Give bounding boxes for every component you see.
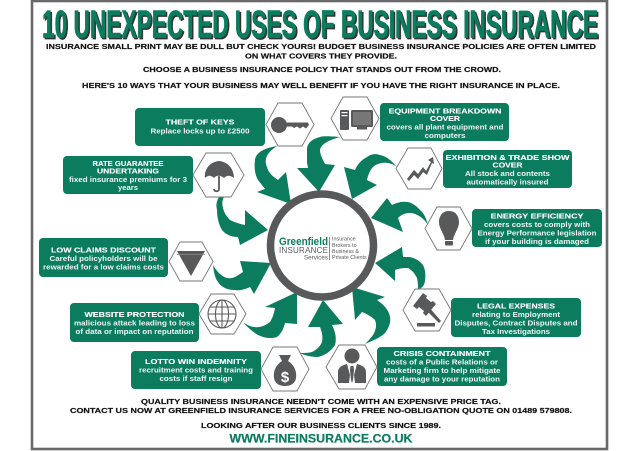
- panel: energy efficiency: ENERGY EFFICIENCY: [490, 212, 584, 220]
- logo: strapline: Private Clients: [332, 255, 367, 261]
- icon: key: [266, 103, 314, 146]
- arrow: theft of keys: [255, 146, 291, 204]
- logo: insurance: INSURANCE: [279, 246, 328, 255]
- panel: energy efficiency: Energy Performance legislation: [478, 228, 596, 238]
- icon: rising chart: [396, 148, 442, 189]
- arrow: energy efficiency: [371, 198, 428, 232]
- logo: services: Services: [304, 254, 329, 262]
- footer text: LOOKING AFTER OUR BUSINESS CLIENTS SINCE 1989.: [201, 421, 441, 430]
- arrow: exhibition and trade show: [344, 154, 397, 199]
- panel: lotto win indemnity: recruitment costs and training: [139, 366, 253, 374]
- panel: rate guarantee undertaking: [63, 156, 193, 194]
- panel: equipment breakdown cover: COVER: [430, 114, 461, 123]
- panel: equipment breakdown cover: computers: [424, 131, 466, 140]
- panel: crisis containment: CRISIS CONTAINMENT: [394, 349, 491, 358]
- panel: equipment breakdown cover: covers all plant equipment and: [386, 122, 504, 132]
- panel: legal expenses: [451, 298, 581, 337]
- icon: money bag: $: [281, 369, 290, 386]
- intro text: ON WHAT COVERS THEY PROVIDE.: [245, 52, 397, 60]
- panel: legal expenses: Disputes, Contract Disputes and: [454, 318, 578, 328]
- panel: website protection: malicious attack leading to loss: [74, 318, 195, 328]
- panel: lotto win indemnity: costs if staff resign: [160, 374, 232, 383]
- intro text: CHOOSE A BUSINESS INSURANCE POLICY THAT STANDS OUT FROM THE CROWD.: [143, 65, 501, 74]
- icon: gavel: [403, 289, 451, 331]
- icon: globe: [199, 294, 246, 334]
- panel: theft of keys: THEFT OF KEYS: [166, 118, 235, 126]
- panel: lotto win indemnity: LOTTO WIN INDEMNITY: [145, 357, 247, 366]
- arrow: rate guarantee: [216, 197, 268, 245]
- arrow: low claims: [213, 261, 271, 294]
- intro text: [46, 42, 597, 90]
- panel: rate guarantee undertaking: fixed insurance premiums for 3: [69, 175, 187, 184]
- panel: energy efficiency: covers costs to comply with: [484, 220, 590, 229]
- panel: low claims discount: Careful policyholders will be: [50, 254, 158, 263]
- panel: legal expenses: Tax Investigations: [482, 327, 550, 336]
- panel: energy efficiency: if your building is damaged: [485, 237, 589, 246]
- intro text: INSURANCE SMALL PRINT MAY BE DULL BUT CHECK YOURS! BUDGET BUSINESS INSURANCE POLICIES ARE OFTEN LIMITED: [46, 42, 597, 51]
- logo: strapline: Insurance: [332, 236, 356, 242]
- panel: theft of keys: Replace locks up to £2500: [150, 126, 250, 136]
- footer text: [70, 397, 572, 430]
- icon: umbrella: [193, 153, 244, 197]
- arrow: equipment breakdown: [297, 136, 340, 192]
- footer text: QUALITY BUSINESS INSURANCE NEEDN'T COME WITH AN EXPENSIVE PRICE TAG.: [141, 397, 501, 406]
- panel: crisis containment: any damage to your reputation: [384, 374, 500, 384]
- logo: strapline: Business &: [332, 249, 359, 255]
- icon: business person: [326, 345, 377, 389]
- panel: legal expenses: relating to Employment: [472, 310, 561, 319]
- footer text: CONTACT US NOW AT GREENFIELD INSURANCE SERVICES FOR A FREE NO-OBLIGATION QUOTE ON 01489 579808.: [70, 406, 572, 415]
- panel: exhibition and trade show cover: COVER: [492, 160, 523, 170]
- panel: website protection: WEBSITE PROTECTION: [84, 310, 184, 319]
- logo: strapline: Brokers to: [332, 243, 357, 249]
- panel: rate guarantee undertaking: RATE GUARANTEE: [92, 159, 164, 168]
- panel: energy efficiency: [472, 209, 602, 247]
- panel: low claims discount: rewarded for a low claims costs: [43, 262, 164, 272]
- panel: exhibition and trade show cover: EXHIBITION & TRADE SHOW: [446, 153, 570, 162]
- panel: exhibition and trade show cover: [443, 150, 572, 188]
- arrow: legal expenses: [375, 247, 425, 290]
- central logo circle: [270, 194, 374, 297]
- panel: equipment breakdown cover: EQUIPMENT BREAKDOWN: [388, 106, 502, 116]
- panel: website protection: [70, 303, 199, 342]
- panel: exhibition and trade show cover: automatically insured: [466, 178, 548, 186]
- panel: theft of keys: [135, 108, 265, 146]
- panel: website protection: of data or impact on reputation: [76, 327, 194, 336]
- arrow: website protection: [243, 292, 297, 338]
- arrow: lotto win: [300, 300, 343, 357]
- arrows: [213, 136, 428, 357]
- icon: money bag: [261, 347, 309, 391]
- panel: crisis containment: costs of a Public Relations or: [386, 358, 498, 366]
- panel: crisis containment: Marketing firm to help mitigate: [384, 366, 500, 375]
- logo: strapline: [332, 236, 367, 261]
- panel: equipment breakdown cover: [380, 103, 509, 141]
- intro text: HERE'S 10 WAYS THAT YOUR BUSINESS MAY WELL BENEFIT IF YOU HAVE THE RIGHT INSURANCE IN PLACE.: [82, 81, 560, 90]
- arrow: crisis containment: [352, 287, 390, 344]
- panel: rate guarantee undertaking: UNDERTAKING: [97, 166, 159, 176]
- panel: legal expenses: LEGAL EXPENSES: [477, 302, 555, 310]
- panel: rate guarantee undertaking: years: [118, 183, 138, 192]
- panel: crisis containment: [377, 347, 507, 386]
- logo: Greenfield: Greenfield: [279, 236, 328, 248]
- icon: light bulb: [425, 207, 472, 250]
- panel: exhibition and trade show cover: All stock and contents: [465, 169, 550, 178]
- panel: lotto win indemnity: [131, 351, 261, 389]
- website address: WWW.FINEINSURANCE.CO.UK: [230, 434, 413, 446]
- panel: low claims discount: LOW CLAIMS DISCOUNT: [51, 246, 157, 254]
- icon: computer: [331, 97, 379, 140]
- icon: downward triangle: [169, 242, 213, 281]
- panel: low claims discount: [39, 238, 168, 277]
